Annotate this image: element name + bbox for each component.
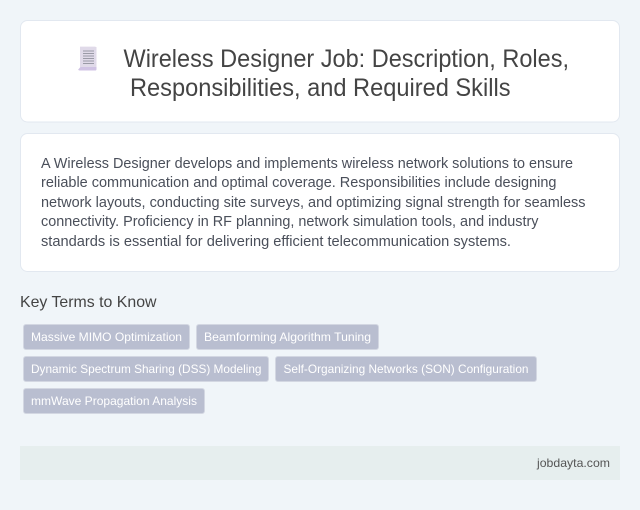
footer bar (20, 446, 620, 480)
title (124, 45, 569, 102)
tag: beamforming (196, 324, 378, 350)
tag: dss modeling (24, 356, 268, 382)
tag: mmwave (24, 388, 204, 414)
title: Responsibilities, and Required Skills (130, 74, 510, 102)
text block: description: A Wireless Designer develops and implements wireless network solutions to ensure (41, 156, 573, 172)
text block: description: standards is essential for delivering efficient telecommunication systems. (41, 234, 511, 250)
text block: description: connectivity. Proficiency in RF planning, network simulation tools, and industry (41, 214, 539, 230)
text block: description (41, 156, 586, 250)
tag: mmwave: mmWave Propagation Analysis (31, 394, 197, 408)
tag: massive mimo: Massive MIMO Optimization (31, 330, 182, 344)
text block: description: reliable communication and optimal coverage. Responsibilities include designing (41, 175, 556, 191)
icon: document scroll (78, 46, 96, 70)
tag: son configuration (276, 356, 536, 382)
panel: title header (20, 20, 620, 122)
text block: description: network layouts, conducting site surveys, and optimizing signal strength for seamless (41, 195, 586, 211)
panel: description (20, 134, 620, 272)
tag: son configuration: Self-Organizing Networks (SON) Configuration (284, 362, 528, 376)
tag: beamforming: Beamforming Algorithm Tuning (204, 330, 371, 344)
tag: dss modeling: Dynamic Spectrum Sharing (DSS) Modeling (31, 362, 262, 376)
title: Wireless Designer Job: Description, Roles, (124, 45, 569, 73)
tag: massive mimo (24, 324, 190, 350)
footer text: jobdayta.com (536, 456, 610, 470)
heading: key terms: Key Terms to Know (20, 294, 157, 311)
